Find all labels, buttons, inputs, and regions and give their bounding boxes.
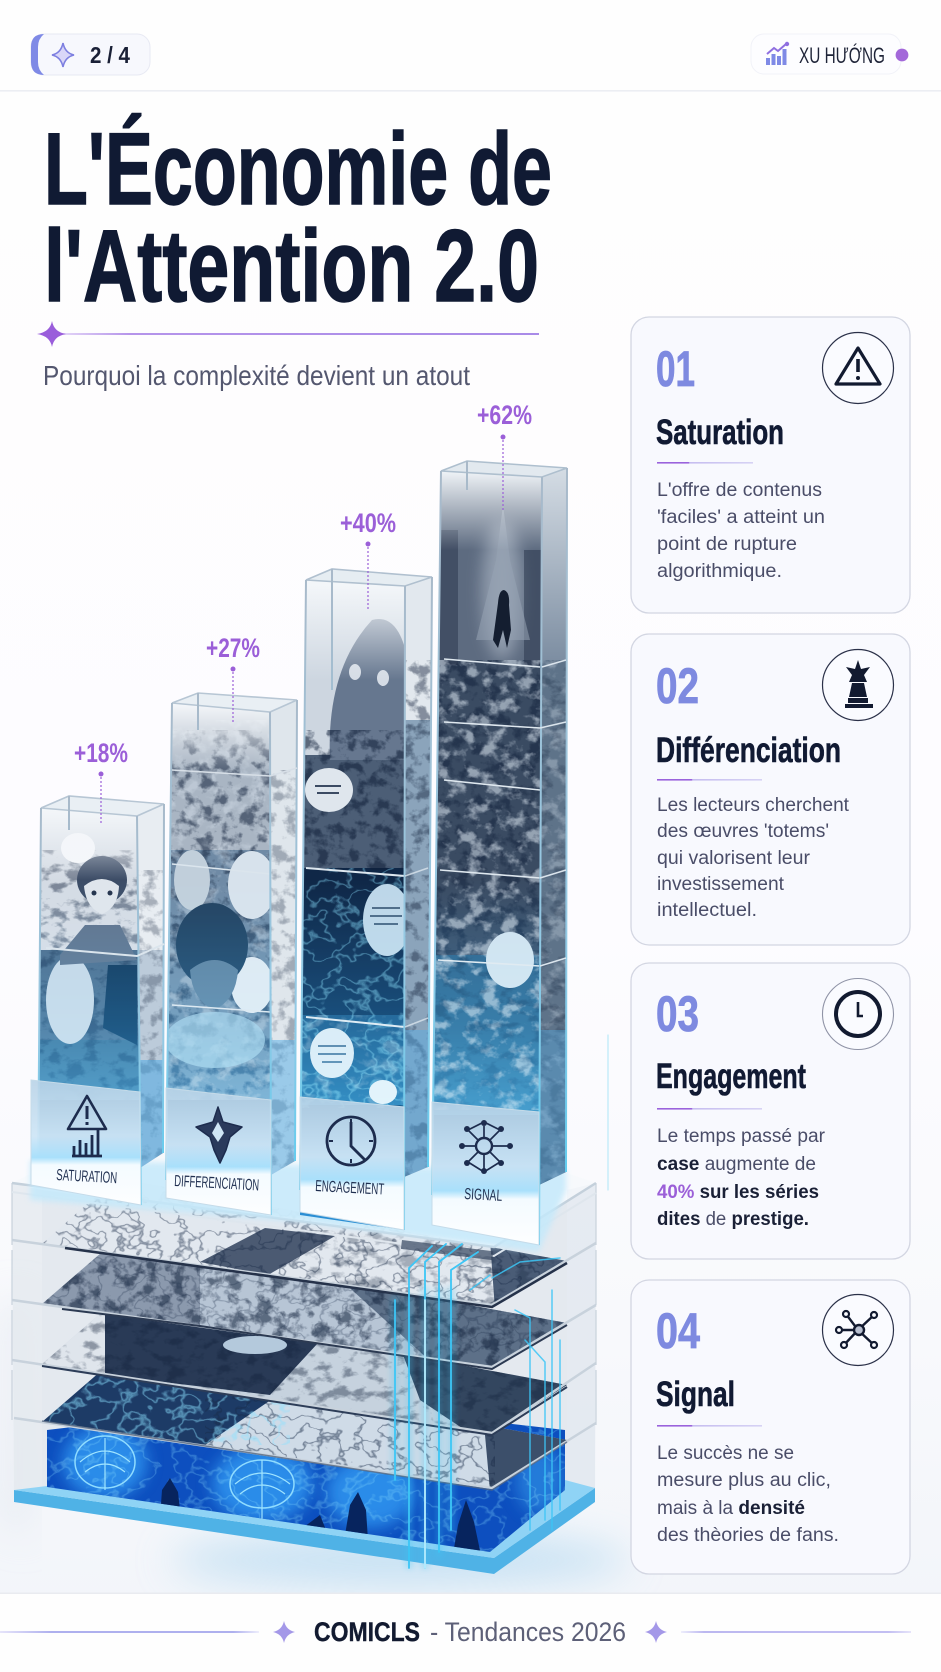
label box with icon [31, 1080, 141, 1205]
front face manga [168, 704, 270, 1150]
icon: footer star left [273, 1621, 295, 1643]
icon: totem [822, 650, 894, 720]
panel: 02 differenciation: 02 [656, 658, 699, 714]
label +62%: +62% [477, 400, 532, 430]
title divider with star [37, 321, 539, 347]
floor glow below stack [0, 1300, 630, 1586]
side face [138, 806, 163, 1167]
icon: warning [822, 332, 894, 404]
panel: 04 signal: 04 [656, 1303, 700, 1359]
body text: Le succès ne se [657, 1443, 794, 1464]
label +27%: +27% [206, 633, 260, 663]
body text: Le temps passé par [657, 1126, 826, 1147]
label box with icon [300, 1097, 404, 1230]
body text: des thèories de fans. [657, 1525, 839, 1546]
body text: dites de prestige. [657, 1209, 809, 1230]
panel: 01 saturation: 01 [656, 341, 695, 397]
manga slab 3 [12, 1314, 596, 1436]
glass glow under towers [30, 1160, 566, 1252]
body text: investissement [657, 874, 785, 895]
label +40% [340, 508, 396, 611]
tower 3: engagement [295, 569, 438, 1235]
body text: 'faciles' a atteint un [657, 507, 825, 528]
body text: 40% sur les séries [657, 1182, 819, 1203]
body text [657, 1126, 826, 1230]
label box with icon: SATURATION [56, 1167, 118, 1187]
body text: case augmente de [657, 1154, 816, 1175]
footer caption: - Tendances 2026 [430, 1617, 626, 1647]
label box with icon [432, 1102, 539, 1245]
side face [405, 578, 431, 1176]
label box with icon: ENGAGEMENT [315, 1178, 385, 1199]
panel: 01 saturation: Saturation [656, 413, 784, 452]
side face [271, 702, 296, 1174]
body text [657, 1443, 839, 1546]
manga slab 4 [14, 1375, 596, 1491]
body text: algorithmique. [657, 561, 782, 582]
tower 4: signal [428, 461, 575, 1250]
page counter chip [31, 34, 150, 75]
body text: point de rupture [657, 534, 797, 555]
label +62% [477, 400, 532, 510]
title: L'Économie de [44, 112, 552, 226]
panel: 03 engagement: 03 [656, 986, 699, 1042]
body text: des œuvres 'totems' [657, 821, 829, 842]
panel: 04 signal: Signal [656, 1375, 735, 1414]
manga slab 2 [12, 1254, 596, 1370]
icon: clock [822, 978, 894, 1050]
side face [540, 469, 566, 1184]
base layer: blue brains [14, 1424, 595, 1574]
front face manga [434, 472, 541, 1169]
body text: mesure plus au clic, [657, 1470, 831, 1491]
glowing circuit lines [395, 1035, 608, 1568]
panel: 03 engagement: Engagement [656, 1057, 806, 1096]
label +27% [206, 633, 260, 724]
footer [0, 1592, 941, 1672]
body text: mais à la densité [657, 1498, 805, 1519]
front face manga [300, 581, 404, 1229]
top glass plate [12, 1140, 596, 1260]
label +18% [74, 738, 128, 825]
body text: qui valorisent leur [657, 848, 811, 869]
body text [657, 480, 825, 582]
manga slab 1 [12, 1199, 596, 1308]
title [44, 112, 552, 323]
title: l'Attention 2.0 [44, 209, 539, 323]
panel: 04 signal [631, 1280, 910, 1574]
trend chip: XU HƯỚNG [799, 43, 885, 68]
panel: 03 engagement [631, 963, 910, 1259]
layered glass base stack [12, 1035, 608, 1574]
footer brand: COMICLS [314, 1617, 420, 1647]
label box with icon [166, 1088, 271, 1215]
label +18%: +18% [74, 738, 128, 768]
body text: intellectuel. [657, 900, 757, 921]
page counter chip: 2 / 4 [90, 42, 130, 68]
header bar [0, 34, 941, 92]
label +40%: +40% [340, 508, 396, 538]
percentage labels with dotted leaders [74, 400, 532, 825]
icon: footer star right [645, 1621, 667, 1643]
label box with icon: SIGNAL [464, 1186, 503, 1205]
front face manga [40, 809, 139, 1142]
body text: L'offre de contenus [657, 480, 822, 501]
panel: 02 differenciation [631, 634, 910, 945]
subtitle: Pourquoi la complexité devient un atout [43, 360, 470, 391]
label box with icon: DIFFERENCIATION [174, 1173, 260, 1194]
tower 2: differenciation [160, 693, 302, 1220]
panel: 01 saturation [631, 317, 910, 613]
glass walls [12, 1183, 596, 1550]
icon: network [822, 1294, 894, 1366]
body text [657, 795, 850, 921]
body text: Les lecteurs cherchent [657, 795, 850, 816]
trend chip [751, 34, 908, 74]
panel: 02 differenciation: Différenciation [656, 731, 841, 770]
tower 1: saturation [31, 796, 170, 1220]
